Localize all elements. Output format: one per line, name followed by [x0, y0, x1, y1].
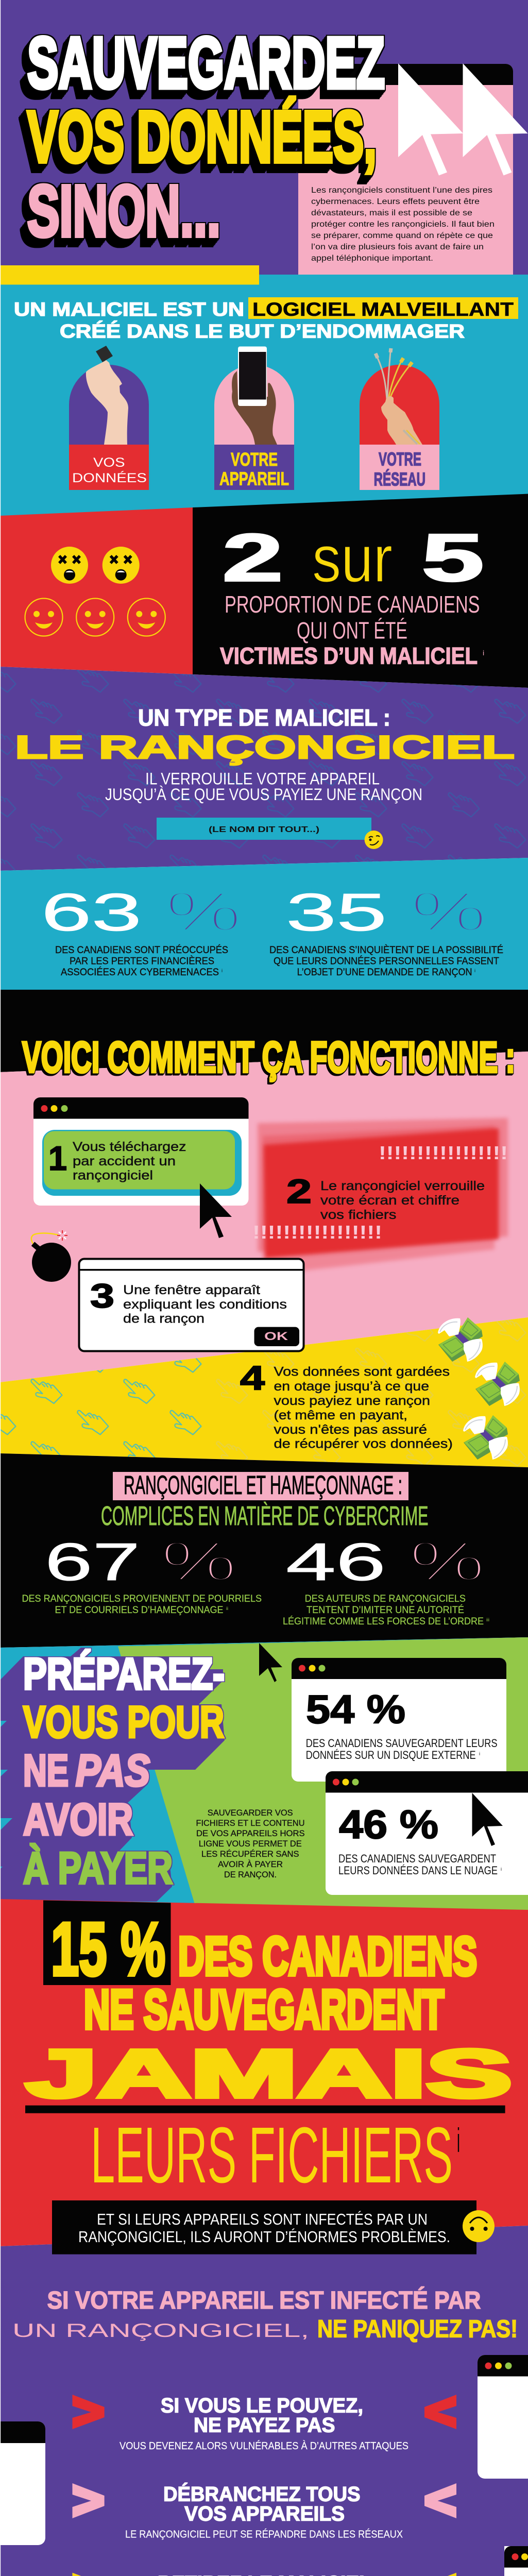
statistic: 2 sur 5	[220, 519, 484, 669]
heading: ne paniquez pas: SI VOTRE APPAREIL EST INFECTÉ PAR	[47, 2286, 481, 2314]
callout: énormes problèmes	[52, 2200, 476, 2255]
step: ne payez pas: VOUS DEVENEZ ALORS VULNÉRABLES À D’AUTRES ATTAQUES	[120, 2440, 408, 2452]
text: step 4	[240, 1359, 453, 1451]
window: step 3	[79, 1259, 304, 1351]
panel: 2 sur 5	[0, 494, 528, 688]
step: débranchez: VOS APPAREILS	[184, 2503, 345, 2526]
window: 46 %	[326, 1771, 528, 1895]
intro text: protéger contre les rançongiciels. Il faut bien	[311, 220, 495, 229]
panel: step 2: !!!!!!!!!!!!!!!!!	[252, 1222, 382, 1243]
panel: 63 and 35 percent	[0, 858, 528, 990]
statistic: 63 %: DES CANADIENS SONT PRÉOCCUPÉS	[55, 945, 228, 956]
window: step 3: de la rançon	[123, 1312, 205, 1326]
text: step 4: vous n'êtes pas assuré	[274, 1422, 427, 1437]
window: bottom right	[504, 2546, 528, 2568]
heading: préparez-vous: PAS	[76, 1746, 150, 1795]
statistic: 46 %: LÉGITIME COMME LES FORCES DE L’ORDRE	[283, 1616, 484, 1627]
statistic: 46 %: iii	[486, 1617, 489, 1622]
panel: malware definition	[0, 265, 528, 522]
card: votre réseau	[360, 348, 439, 490]
window: right	[478, 2355, 528, 2479]
window: left	[0, 2421, 45, 2545]
panel: prepare	[0, 1637, 528, 1911]
window: step 1: Vous téléchargez	[73, 1140, 186, 1154]
card: vos données	[69, 346, 149, 490]
statistic: 35 %: DES CANADIENS S’INQUIÈTENT DE LA POSSIBILITÉ	[269, 945, 503, 956]
statistic: 2 sur 5: sur	[312, 522, 393, 596]
heading: préparez-vous: NE	[23, 1746, 69, 1795]
heading: des canadiens ne sauvegardent	[84, 1926, 477, 2040]
step: débranchez: DÉBRANCHEZ TOUS	[163, 2482, 361, 2506]
statistic: 63 %: i	[222, 968, 223, 973]
text: verrouille: IL VERROUILLE VOTRE APPAREIL	[145, 770, 380, 788]
statistic: 2 sur 5: QUI ONT ÉTÉ	[297, 617, 407, 644]
panel: phishing	[0, 1453, 528, 1648]
intro text: appel téléphonique important.	[311, 254, 433, 263]
window: 54 %: DONNÉES SUR UN DISQUE EXTERNE	[306, 1749, 476, 1761]
panel: step 2: Le rançongiciel verrouille	[320, 1179, 485, 1193]
statistic: 67 %: %	[161, 1530, 237, 1592]
heading: préparez-vous: PRÉPAREZ-	[23, 1650, 225, 1699]
heading: ne paniquez pas	[12, 2286, 518, 2343]
heading: préparez-vous: AVOIR	[23, 1795, 133, 1844]
statistic: 15 %: 15 %	[51, 1907, 165, 1991]
text: step 4: en otage jusqu’à ce que	[274, 1379, 429, 1394]
window: 46 %: DES CANADIENS SAUVEGARDENT	[338, 1852, 496, 1865]
card: votre appareil: VOTRE	[231, 449, 278, 470]
text: sauvegarder vos fichiers: AVOIR À PAYER	[218, 1859, 283, 1869]
button: OK	[254, 1327, 299, 1346]
statistic: 2 sur 5: 5	[421, 519, 484, 596]
card: vos données: DONNÉES	[72, 470, 147, 485]
callout: le nom dit tout	[157, 818, 371, 840]
intro text: l’on va dire plusieurs fois avant de faire un	[311, 243, 484, 251]
window: 46 %: i	[501, 1867, 502, 1872]
panel: step 2: vos fichiers	[320, 1208, 397, 1222]
panel: if infected	[0, 2200, 528, 2576]
heading: malware definition: LOGICIEL MALVEILLANT	[252, 299, 514, 320]
window: 54 %: i	[479, 1751, 480, 1756]
window: 46 %: 46 %	[339, 1802, 438, 1847]
intro text: Les rançongiciels constituent l’une des pires	[311, 186, 492, 195]
card: votre appareil: APPAREIL	[219, 468, 289, 489]
heading: jamais: JAMAIS	[26, 2036, 512, 2111]
icon: bomb	[31, 1230, 71, 1282]
heading: rançongiciel et hameçonnage	[101, 1470, 429, 1531]
panel: 15 percent never back up	[0, 1899, 528, 2246]
intro text: cybermenaces. Leurs effets peuvent être	[311, 197, 480, 206]
icon: flying money	[438, 1317, 520, 1460]
window: step 1: rançongiciel	[73, 1168, 153, 1183]
window: 54 %	[292, 1658, 506, 1782]
button: OK: OK	[264, 1330, 288, 1343]
statistic: 67 %: ii	[226, 1606, 228, 1611]
step: débranchez	[72, 2482, 456, 2540]
statistic: 46 %: %	[409, 1530, 485, 1592]
text: step 4: vous payiez une rançon	[274, 1394, 430, 1408]
text: step 4: Vos données sont gardées	[274, 1365, 450, 1379]
text: sauvegarder vos fichiers: FICHIERS ET LE CONTENU	[196, 1819, 305, 1828]
statistic: 63 %: %	[165, 880, 242, 943]
text: sauvegarder vos fichiers: SAUVEGARDER VOS	[208, 1808, 293, 1818]
heading: le rançongiciel: LE RANÇONGICIEL	[15, 730, 515, 766]
intro text: se préparer, comme quand on répète ce que	[311, 231, 493, 240]
window: intro	[298, 64, 513, 275]
heading: un type de maliciel: UN TYPE DE MALICIEL :	[138, 705, 390, 731]
panel: 15 percent never back up: i	[457, 2121, 460, 2159]
window: step 1: 1	[48, 1139, 67, 1177]
icon: upside-down face	[463, 2210, 495, 2242]
statistic: 2 sur 5: i	[483, 649, 484, 657]
statistic: 67 %: DES RANÇONGICIELS PROVIENNENT DE POURRIELS	[22, 1594, 262, 1604]
step: ne payez pas: NE PAYEZ PAS	[194, 2414, 335, 2437]
heading: préparez-vous: VOUS POUR	[23, 1698, 224, 1747]
panel: step 2: !!!!!!!!!!!!!!!!!	[379, 1142, 508, 1163]
step: ne payez pas	[72, 2395, 456, 2452]
panel: how it works	[0, 990, 528, 1467]
window: 54 %: 54 %	[306, 1687, 405, 1732]
icon: white cursors	[398, 63, 527, 175]
icon: small cursor	[259, 1643, 282, 1682]
text: sauvegarder vos fichiers: LIGNE VOUS PERMET DE	[199, 1839, 302, 1849]
icon: wink face	[365, 831, 383, 849]
icon: black cursor	[200, 1183, 232, 1238]
intro text	[311, 186, 495, 263]
statistic: 46 %	[283, 1530, 489, 1627]
card: votre réseau: VOTRE	[379, 448, 421, 470]
card: vos données: VOS	[93, 455, 125, 470]
text: step 4: 4	[240, 1359, 265, 1397]
statistic: 63 %	[41, 880, 242, 978]
statistic: 67 %	[22, 1530, 262, 1616]
card: votre appareil	[214, 346, 294, 490]
statistic: 15 %	[43, 1900, 171, 1991]
statistic: 67 %: 67	[45, 1532, 140, 1591]
panel: ransomware definition	[0, 667, 528, 871]
window: step 3: 3	[90, 1277, 114, 1315]
text: sauvegarder vos fichiers	[196, 1808, 305, 1879]
step: retirez le maliciel	[72, 2572, 456, 2576]
statistic: 35 %: QUE LEURS DONNÉES PERSONNELLES FASSENT	[274, 956, 499, 967]
window: 46 %: LEURS DONNÉES DANS LE NUAGE	[338, 1864, 498, 1877]
text: sauvegarder vos fichiers: DE RANÇON.	[224, 1870, 277, 1879]
window: step 1: par accident un	[73, 1154, 176, 1168]
callout: énormes problèmes: ET SI LEURS APPAREILS SONT INFECTÉS PAR UN	[97, 2210, 428, 2228]
icon: five faces	[25, 547, 165, 636]
text: sauvegarder vos fichiers: LES RÉCUPÉRER SANS	[201, 1849, 299, 1859]
text: step 4: de récupérer vos données)	[274, 1437, 453, 1451]
statistic: 63 %: ASSOCIÉES AUX CYBERMENACES	[61, 967, 219, 978]
callout: le nom dit tout: (LE NOM DIT TOUT...)	[209, 825, 319, 834]
statistic: 63 %: PAR LES PERTES FINANCIÈRES	[70, 956, 214, 967]
panel: step 2: votre écran et chiffre	[320, 1193, 459, 1208]
statistic: 2 sur 5: VICTIMES D’UN MALICIEL	[220, 643, 478, 669]
callout: énormes problèmes: RANÇONGICIEL, ILS AURONT D’ÉNORMES PROBLÈMES.	[78, 2228, 450, 2246]
statistic: 67 %: ET DE COURRIELS D’HAMEÇONNAGE	[55, 1605, 224, 1616]
card: votre réseau: RÉSEAU	[374, 469, 425, 489]
intro text: dévastateurs, mais il est possible de se	[311, 209, 472, 217]
text: verrouille	[105, 770, 422, 804]
title: SINON...	[27, 170, 220, 251]
statistic: 63 %: 63	[41, 883, 142, 942]
step: débranchez: LE RANÇONGICIEL PEUT SE RÉPANDRE DANS LES RÉSEAUX	[125, 2529, 403, 2540]
heading: préparez-vous	[23, 1650, 225, 1893]
heading: malware definition	[14, 297, 518, 342]
statistic: 35 %	[269, 880, 503, 978]
text: sauvegarder vos fichiers: DE VOS APPAREILS HORS	[196, 1829, 305, 1838]
heading: ne paniquez pas: UN RANÇONGICIEL,	[12, 2320, 309, 2341]
statistic: 2 sur 5: 2	[222, 519, 283, 596]
statistic: 46 %: TENTENT D’IMITER UNE AUTORITÉ	[306, 1605, 464, 1616]
window: step 3: Une fenêtre apparaît	[123, 1283, 260, 1297]
panel: step 2	[252, 1118, 508, 1275]
heading: malware definition: CRÉÉ DANS LE BUT D’ENDOMMAGER	[60, 321, 465, 342]
text: step 4: (et même en payant,	[274, 1408, 407, 1422]
step: ne payez pas: SI VOUS LE POUVEZ,	[161, 2395, 363, 2417]
statistic: 35 %: i	[474, 968, 475, 973]
statistic: 35 %: 35	[286, 883, 387, 942]
heading: malware definition: UN MALICIEL EST UN	[14, 299, 244, 320]
statistic: 46 %: 46	[286, 1532, 386, 1591]
statistic: 35 %: L’OBJET D’UNE DEMANDE DE RANÇON	[297, 967, 472, 978]
statistic: 46 %: DES AUTEURS DE RANÇONGICIELS	[305, 1594, 466, 1604]
window: step 1	[33, 1097, 248, 1206]
window: step 3: expliquant les conditions	[123, 1297, 287, 1312]
heading: préparez-vous: À PAYER	[23, 1843, 173, 1893]
statistic: 35 %: %	[411, 880, 487, 943]
text: verrouille: JUSQU’À CE QUE VOUS PAYIEZ UNE RANÇON	[105, 785, 422, 804]
title	[27, 22, 385, 251]
panel: step 2: 2	[286, 1172, 312, 1210]
panel: header	[0, 0, 528, 275]
